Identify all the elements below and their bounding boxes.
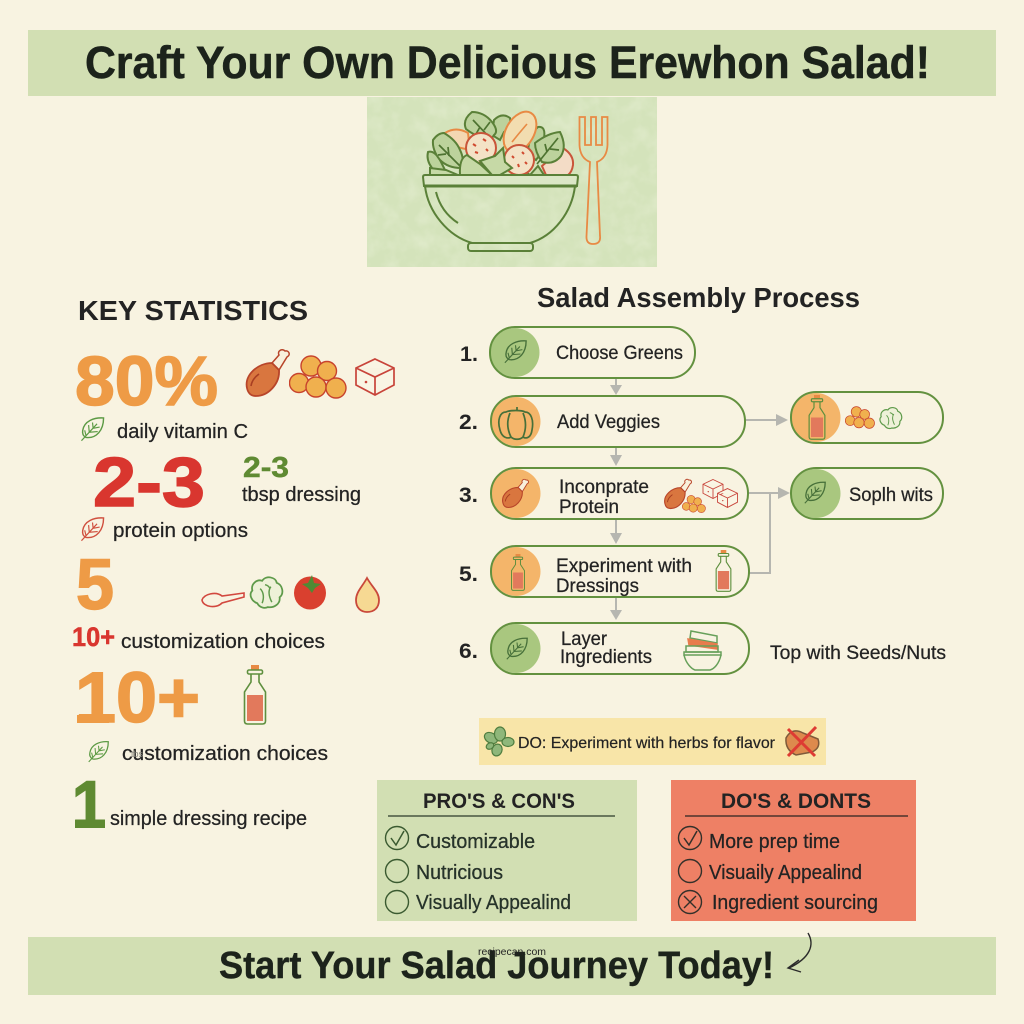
watermark: recipecan.com — [478, 947, 546, 958]
icon: stacked bowls — [684, 631, 721, 670]
stat: 10+ customization choices (orange): customization choices — [122, 743, 328, 765]
hero illustration: salad bowl and fork — [367, 97, 657, 267]
stat: 10+ customization choices (orange): tbs — [131, 749, 144, 759]
stat: 2-3 protein options: protein options — [113, 520, 248, 542]
heading: key statistics: KEY STATISTICS — [78, 295, 308, 326]
label: top with seeds and nuts: Top with Seeds/Nuts — [770, 643, 946, 664]
footer banner — [28, 937, 996, 995]
step 3: incorporate protein — [459, 468, 748, 519]
icon: green leaf — [89, 742, 108, 762]
side card: soplh wits: Soplh wits — [849, 485, 933, 506]
step 1: choose greens: 1. — [460, 343, 478, 366]
item: customizable — [386, 826, 535, 853]
stat: 10+ customization choices (red) — [72, 622, 325, 653]
stat: 10+ customization choices (orange): 10+ — [75, 659, 200, 738]
stat: 1 simple dressing recipe: simple dressing recipe — [110, 808, 307, 830]
panel: dos and donts — [671, 780, 916, 921]
footer banner: Start Your Salad Journey Today! — [219, 945, 774, 987]
step 5: experiment with dressings — [459, 546, 749, 597]
stat: 80% daily vitamin C: daily vitamin C — [117, 421, 248, 443]
callout: do experiment with herbs: DO: Experiment with herbs for flavor — [518, 735, 776, 752]
panel: pros and cons — [377, 780, 637, 921]
icon: crossed-out food — [786, 727, 819, 756]
item: more prep time: More prep time — [709, 831, 840, 853]
icon: bell pepper — [499, 407, 533, 439]
step 6: layer ingredients: Layer — [561, 629, 608, 650]
icon: tomato — [294, 575, 326, 610]
step 3: incorporate protein: 3. — [459, 484, 478, 507]
item: customizable: Customizable — [416, 831, 535, 853]
icon: drumstick — [503, 479, 529, 508]
step 3: incorporate protein: Protein — [559, 497, 619, 518]
step 6: layer ingredients — [459, 623, 749, 674]
item: visuaily appealind: Visuaily Appealind — [709, 862, 862, 884]
step 2: add veggies: 2. — [459, 411, 478, 434]
icon: chicken drumstick — [247, 350, 289, 396]
stat: 1 simple dressing recipe: 1 — [72, 767, 106, 841]
item: visually appealind: Visually Appealind — [416, 892, 571, 914]
stat: 10+ customization choices (red): customization choices — [121, 631, 325, 653]
title banner: Craft Your Own Delicious Erewhon Salad! — [85, 37, 930, 88]
icon: oil drop — [356, 578, 379, 612]
stat: 1 simple dressing recipe — [72, 767, 307, 841]
icon: chickpeas — [290, 356, 346, 398]
stat: 2-3 protein options: 2-3 — [93, 443, 205, 521]
stat: 80% daily vitamin C: 80% — [75, 342, 218, 420]
item: more prep time — [678, 826, 840, 853]
icon: spoon — [202, 593, 244, 607]
flow arrows — [610, 378, 790, 620]
step 5: experiment with dressings: 5. — [459, 563, 478, 586]
step 3: incorporate protein: Inconprate — [559, 477, 649, 498]
stat: 10+ customization choices (orange) — [75, 659, 328, 765]
step 5: experiment with dressings: Experiment with — [556, 556, 692, 577]
step 6: layer ingredients: Ingredients — [560, 647, 652, 668]
step 1: choose greens: Choose Greens — [556, 343, 683, 364]
step 2: add veggies — [459, 396, 745, 447]
step 5: experiment with dressings: Dressings — [556, 576, 639, 597]
stat: 2-3 protein options — [81, 443, 361, 542]
icon: green leaf — [81, 418, 104, 441]
heading: salad assembly process: Salad Assembly Process — [537, 282, 860, 313]
panel: pros and cons: PRO'S & CON'S — [423, 790, 575, 813]
icon: red leaf — [81, 518, 104, 541]
panel: dos and donts: DO'S & DONTS — [721, 790, 871, 813]
icon: chicken, chickpeas and cubes — [665, 479, 737, 513]
step 1: choose greens — [460, 327, 695, 378]
stat: 80% daily vitamin C — [75, 342, 394, 443]
step 6: layer ingredients: 6. — [459, 640, 478, 663]
arrow: pointing to footer call to action — [788, 933, 811, 972]
icon: broccoli — [251, 577, 282, 608]
stat: 5 with ingredient icons: 5 — [76, 546, 114, 625]
step 2: add veggies: Add Veggies — [557, 412, 660, 433]
stat: 5 with ingredient icons — [76, 546, 379, 625]
icon: leaf — [505, 341, 526, 363]
side card: dressing, chickpeas, cabbage — [791, 392, 943, 443]
item: nutricious: Nutricious — [416, 862, 503, 884]
icon: dressing bottle — [244, 665, 266, 724]
item: ingredient sourcing: Ingredient sourcing — [712, 892, 878, 914]
icon: mint sprig — [482, 727, 514, 757]
side card: soplh wits — [791, 468, 943, 519]
stat: 10+ customization choices (red): 10+ — [72, 622, 115, 652]
callout: do experiment with herbs — [479, 718, 826, 765]
item: nutricious — [386, 860, 503, 884]
icon: tofu cube — [356, 359, 394, 395]
stat: 2-3 protein options: 2-3 — [243, 452, 289, 484]
stat: 2-3 protein options: tbsp dressing — [242, 484, 361, 506]
